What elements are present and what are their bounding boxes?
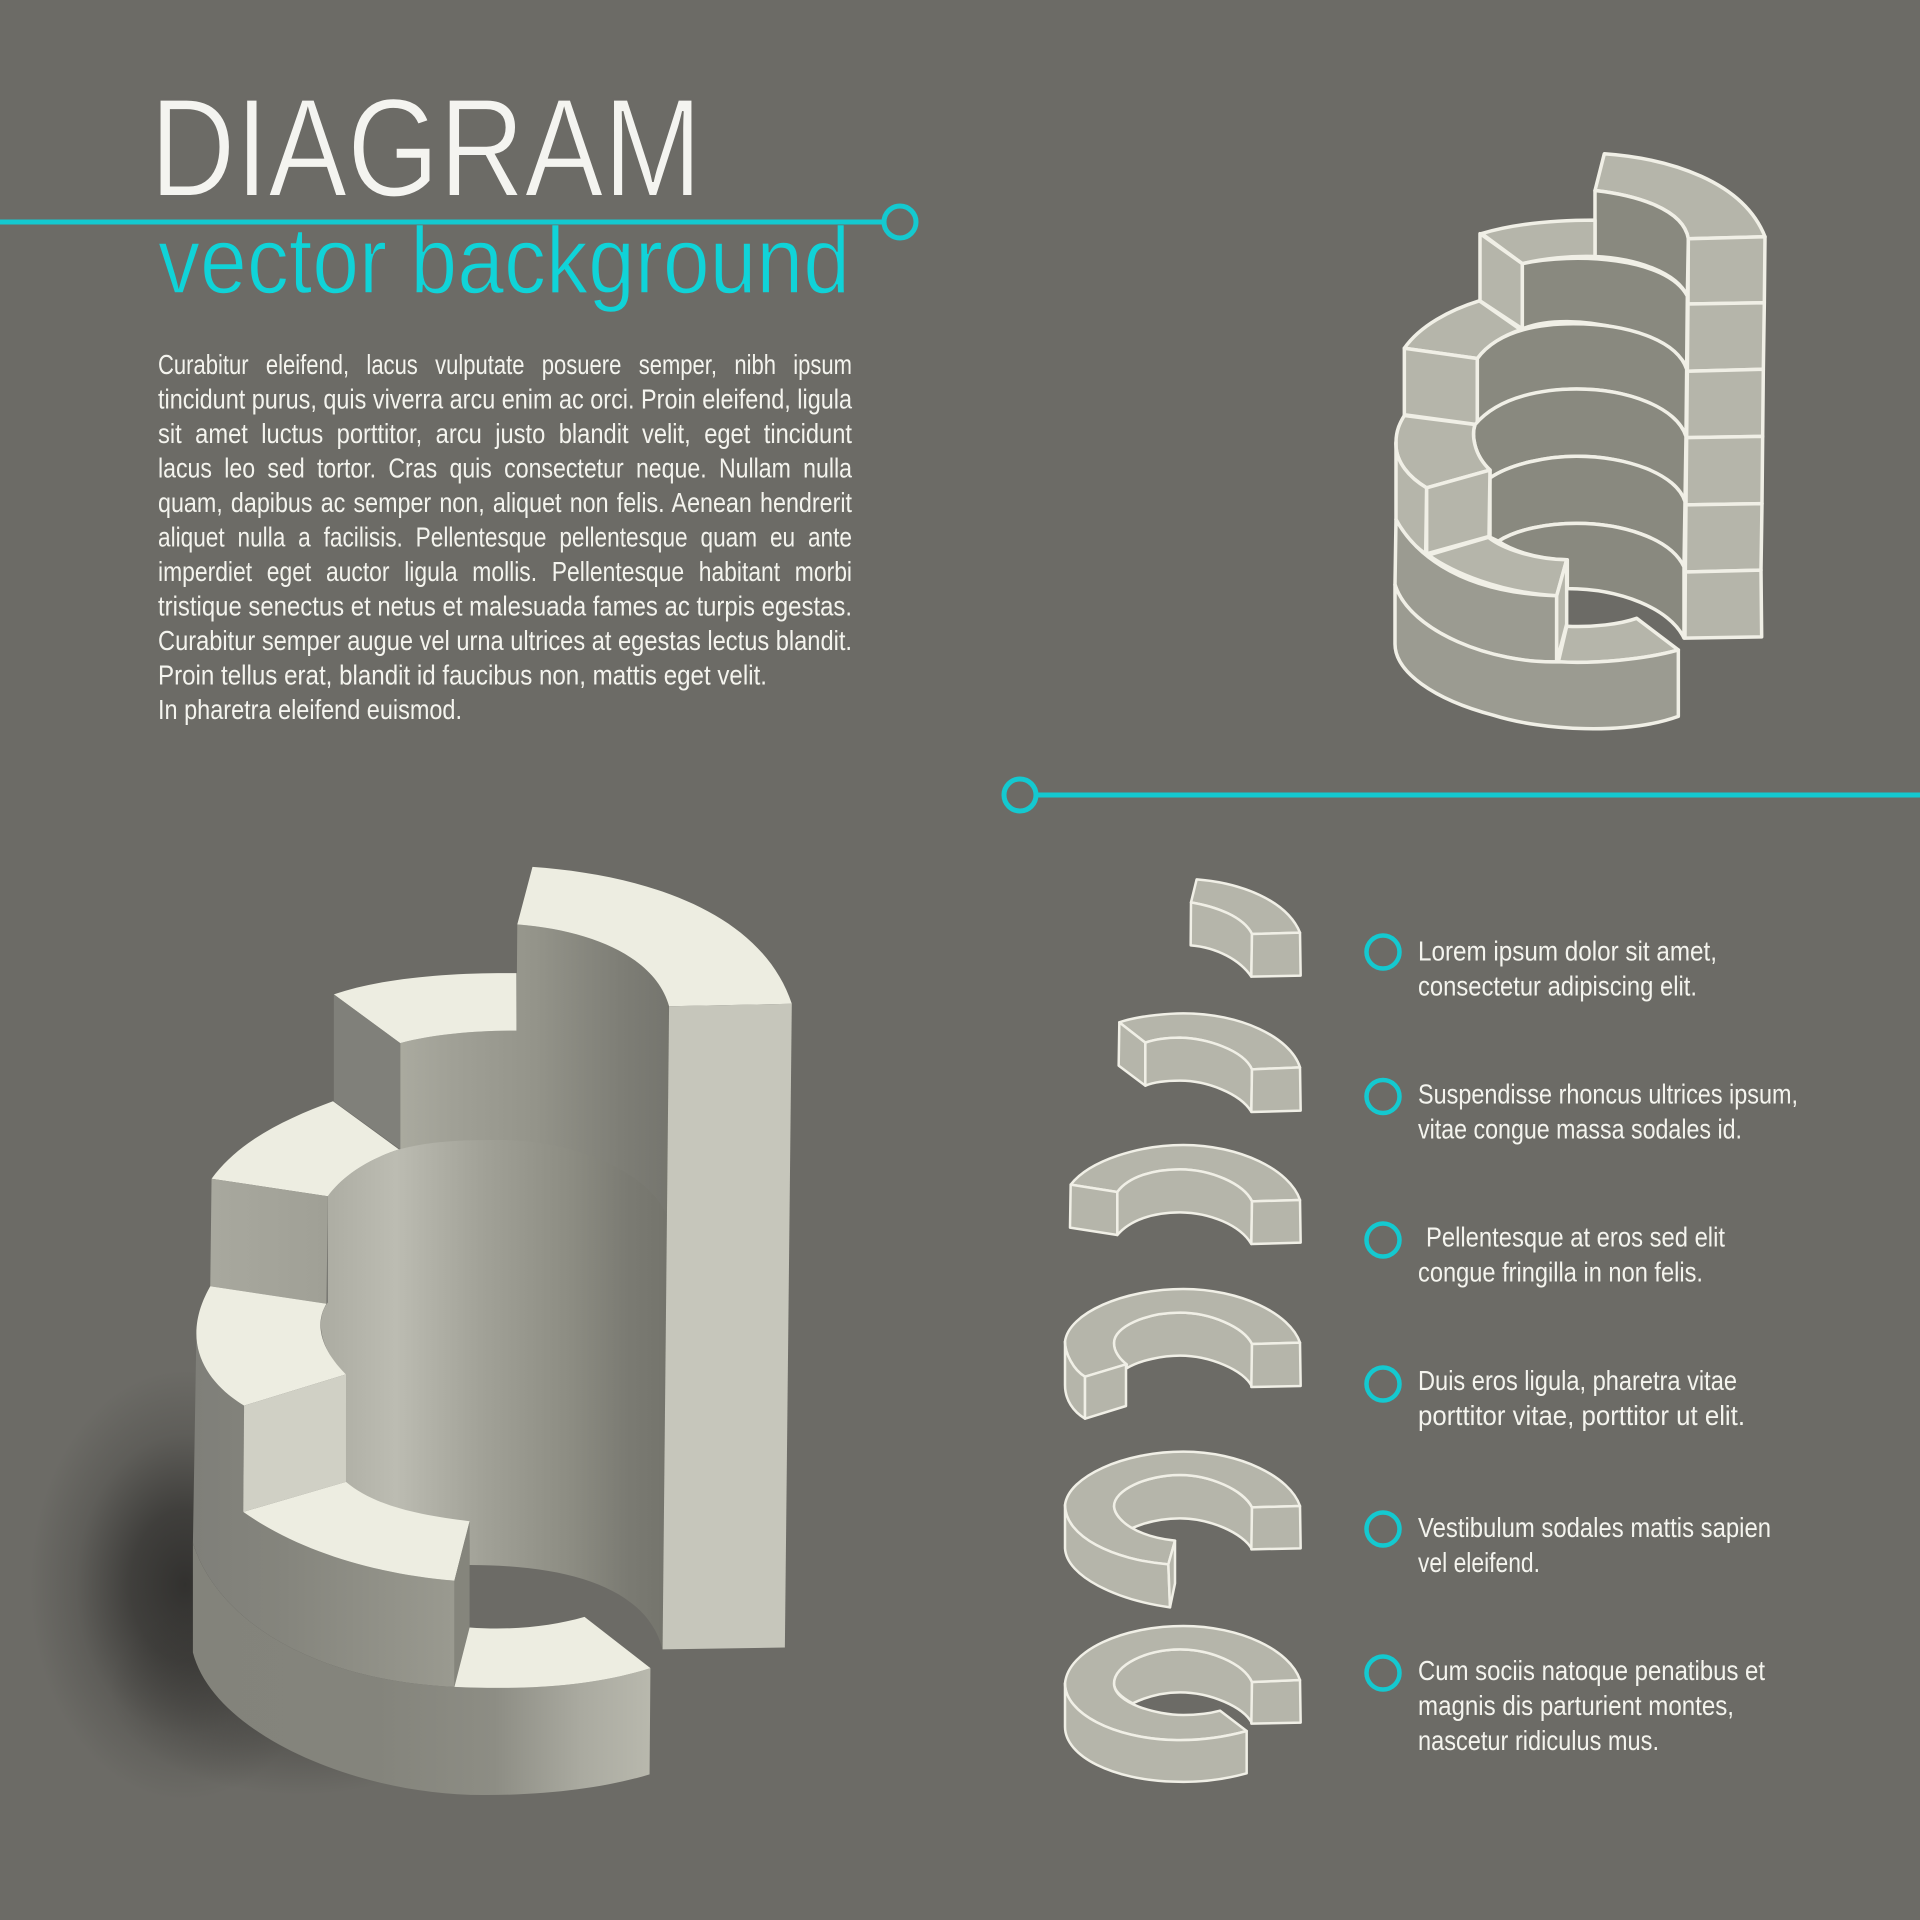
body text: Proin tellus erat, blandit id faucibus non, mattis eget velit. [158, 660, 767, 690]
body text: sit amet luctus porttitor, arcu justo blandit velit, eget tincidunt [158, 418, 852, 449]
legend item 6 [1366, 1655, 1765, 1756]
body text: tincidunt purus, quis viverra arcu enim ac orci. Proin eleifend, ligula [158, 384, 853, 414]
legend item 5: Vestibulum sodales mattis sapien [1418, 1512, 1771, 1543]
body text: Curabitur semper augue vel urna ultrices at egestas lectus blandit. [158, 625, 852, 656]
legend item 4: porttitor vitae, porttitor ut elit. [1418, 1400, 1745, 1431]
legend item 3 [1366, 1222, 1725, 1288]
legend item 1 [1366, 936, 1717, 1002]
title: DIAGRAM [150, 69, 702, 226]
layer piece 6 [1065, 1626, 1301, 1782]
layer piece 5 [1065, 1452, 1301, 1607]
legend item 4: Duis eros ligula, pharetra vitae [1418, 1365, 1737, 1396]
body text: imperdiet eget auctor ligula mollis. Pellentesque habitant morbi [158, 556, 852, 587]
layer piece 3 [1070, 1145, 1301, 1244]
legend item 3: congue fringilla in non felis. [1418, 1256, 1703, 1288]
subtitle: vector background [158, 208, 850, 314]
body text: tristique senectus et netus et malesuada fames ac turpis egestas. [158, 590, 852, 622]
body text: aliquet nulla a facilisis. Pellentesque pellentesque quam eu ante [158, 522, 852, 552]
shaded 3D stepped diagram [193, 867, 792, 1795]
section rule with circle [1004, 779, 1920, 811]
body text: Curabitur eleifend, lacus vulputate posuere semper, nibh ipsum [158, 349, 852, 380]
legend item 1: consectetur adipiscing elit. [1418, 970, 1697, 1002]
legend item 2: vitae congue massa sodales id. [1418, 1114, 1742, 1144]
layer piece 4 [1065, 1289, 1301, 1419]
title rule with circle [0, 206, 916, 238]
legend item 6: magnis dis parturient montes, [1418, 1690, 1734, 1721]
legend item 5 [1366, 1512, 1771, 1578]
cast shadow [30, 1370, 490, 1800]
body text: In pharetra eleifend euismod. [158, 694, 462, 725]
body text: quam, dapibus ac semper non, aliquet non felis. Aenean hendrerit [158, 487, 852, 518]
exploded layer pieces [1065, 879, 1301, 1782]
outlined stepped diagram [1395, 154, 1765, 729]
body text: lacus leo sed tortor. Cras quis consectetur neque. Nullam nulla [158, 452, 853, 484]
legend item 6: nascetur ridiculus mus. [1418, 1725, 1659, 1756]
body text [158, 349, 853, 725]
legend item 6: Cum sociis natoque penatibus et [1418, 1655, 1765, 1686]
legend item 3: Pellentesque at eros sed elit [1426, 1222, 1725, 1252]
layer piece 1 [1191, 879, 1301, 977]
legend item 2 [1366, 1078, 1798, 1144]
legend item 2: Suspendisse rhoncus ultrices ipsum, [1418, 1078, 1798, 1110]
legend list [1366, 936, 1798, 1756]
legend item 1: Lorem ipsum dolor sit amet, [1418, 936, 1717, 966]
legend item 5: vel eleifend. [1418, 1547, 1540, 1578]
legend item 4 [1366, 1365, 1745, 1431]
layer piece 2 [1119, 1013, 1301, 1112]
